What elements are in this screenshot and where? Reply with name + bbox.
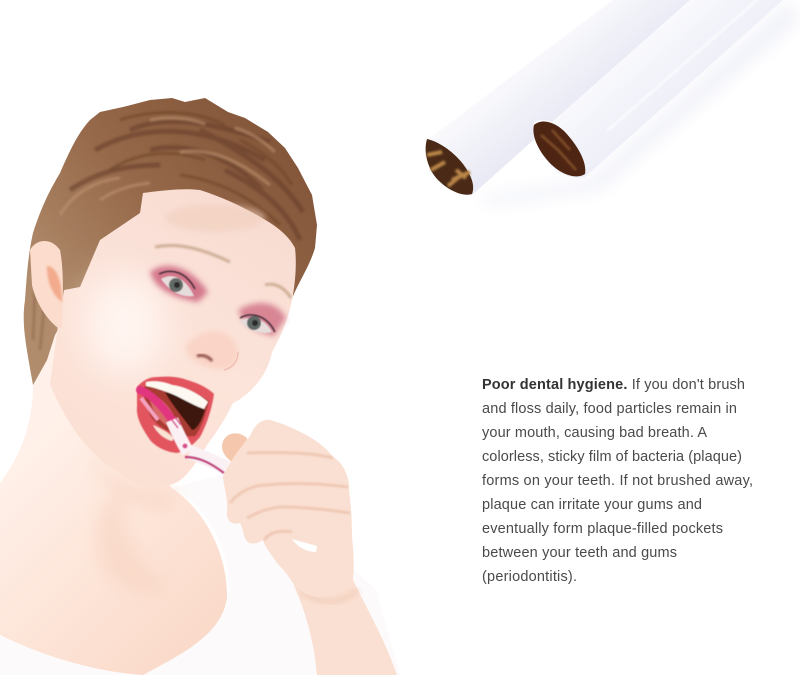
ear [30, 241, 63, 328]
hand and forearm [222, 420, 397, 675]
singlet [143, 470, 400, 675]
text block: poor dental hygiene: colorless, sticky film of bacteria (plaque) [482, 449, 742, 465]
text block: poor dental hygiene: between your teeth and gums [482, 545, 677, 561]
text block: poor dental hygiene: your mouth, causing bad breath. A [482, 425, 707, 441]
text block: poor dental hygiene: (periodontitis). [482, 569, 577, 585]
cigarette: right [533, 0, 783, 178]
neck and shoulder [0, 320, 227, 675]
mouth [137, 377, 214, 453]
eye shadow [150, 266, 208, 302]
text block: poor dental hygiene: plaque can irritate your gums and [482, 497, 702, 513]
photo: woman brushing teeth [0, 98, 400, 675]
text block: poor dental hygiene [482, 377, 753, 585]
nose [186, 331, 238, 370]
toothbrush [140, 390, 228, 473]
text block: poor dental hygiene: and floss daily, food particles remain in [482, 401, 737, 417]
eye left [159, 271, 195, 296]
text block: poor dental hygiene: Poor dental hygiene. If you don't brush [482, 377, 745, 393]
text block: poor dental hygiene: forms on your teeth. If not brushed away, [482, 473, 753, 489]
cigarette shadows [475, 0, 800, 205]
toothbrush end [292, 539, 317, 552]
text block: poor dental hygiene: eventually form plaque-filled pockets [482, 521, 723, 537]
face [50, 189, 296, 487]
eyebrows [155, 245, 230, 262]
cigarette: left [426, 0, 690, 195]
photo: cigarettes [426, 0, 800, 205]
eye right [240, 315, 275, 333]
hair [24, 98, 317, 385]
